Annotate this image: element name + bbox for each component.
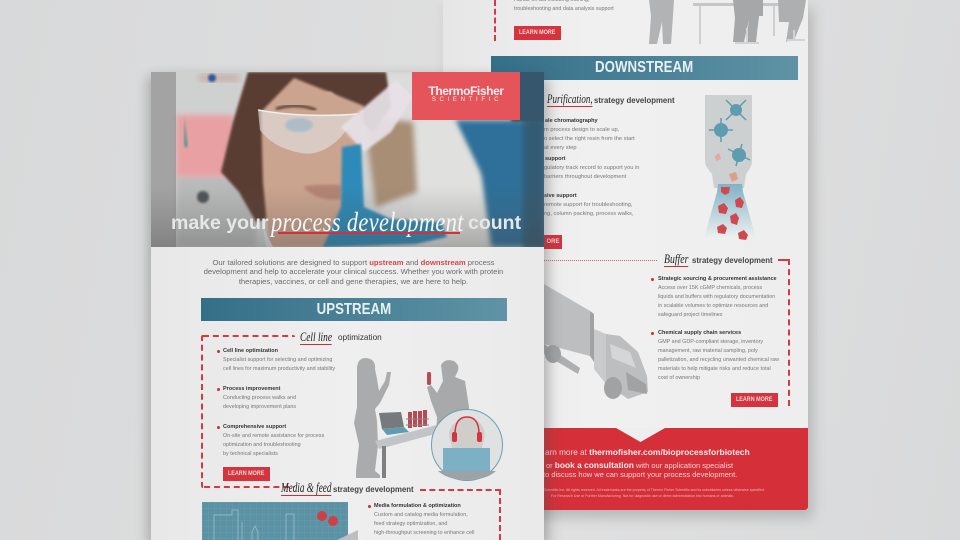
text block: chemical supply chain: GMP and GDP-compliant storage, inventory (658, 339, 763, 345)
heading: cell line optimization: optimization (338, 333, 382, 342)
text block: regulatory support: support (545, 156, 565, 162)
dashed border: media section (420, 489, 501, 540)
text block: strategic sourcing: in scalable volumes to optimize resources and (658, 303, 768, 309)
text block: chemical supply chain: palletization, and recycling unwanted chemical raw (658, 357, 779, 363)
heading: cell line optimization (300, 329, 382, 345)
heading: media and feed strategy (280, 480, 414, 496)
logo: Thermo Fisher Scientific: ThermoFisher (428, 84, 504, 98)
dashed border: cell line section (201, 335, 295, 488)
photo: scientist with goggles and test tube (151, 72, 544, 247)
button: learn more top: LEARN MORE (519, 29, 556, 36)
text block: book a consultation: to discuss how we can support your process development. (543, 470, 737, 479)
button: learn more buffer (731, 393, 778, 407)
text block: cell line optimization (217, 348, 335, 372)
heading band: upstream: UPSTREAM (317, 301, 391, 318)
logo: Thermo Fisher Scientific: SCIENTIFIC (432, 97, 502, 103)
text block: comprehensive support: remote support for troubleshooting, (544, 202, 633, 208)
illustration: lab staff at desk (649, 0, 806, 44)
text block: chromatography: ale chromatography (545, 118, 598, 124)
heading: purification strategy: strategy development (594, 96, 675, 105)
text block: regulatory support: barriers throughout development (544, 174, 626, 180)
text block: comprehensive support: sive support (544, 193, 577, 199)
heading band: downstream (491, 56, 798, 80)
text block: chromatography: m process design to scale up, (544, 127, 619, 133)
text block: legal (544, 488, 765, 498)
button: learn more buffer: LEARN MORE (736, 396, 773, 403)
text block: process improvement (217, 386, 296, 410)
title: process development (271, 207, 464, 237)
illustration: scientists at lab bench (354, 358, 469, 478)
heading: media and feed strategy: strategy development (333, 485, 414, 494)
dashed border: top section (494, 0, 496, 41)
heading: purification strategy: Purification, (547, 91, 593, 106)
panel: front page upstream (151, 72, 544, 540)
text block: comprehensive support (217, 424, 324, 457)
illustration: media lab blueprint (202, 502, 358, 540)
text block: media formulation: high-throughput screening to enhance cell (374, 530, 474, 536)
illustration: delivery truck (544, 284, 648, 399)
title: count (468, 212, 521, 234)
text block: chemical supply chain: management, raw material sampling, poly (658, 348, 758, 354)
text block: chromatography: at every step (544, 145, 577, 151)
text block: chemical supply chain (651, 330, 779, 381)
text block: book a consultation: or book a consultation with our application specialist (546, 460, 733, 470)
text block: media formulation: Custom and catalog media formulation, (374, 512, 468, 518)
text block: hands-on support (514, 0, 614, 12)
icon: circular inset technician with headphones (431, 409, 503, 481)
text block: hands-on support: troubleshooting and data analysis support (514, 6, 614, 12)
dashed border: buffer section (544, 260, 657, 261)
heading band: downstream: DOWNSTREAM (595, 59, 694, 76)
text block: legal: Scientific Inc. All rights reserved. All trademarks are the property of Thermo Fisher Scientific and its subsidiaries unless otherwise specified. (544, 488, 765, 492)
heading: purification strategy (547, 91, 675, 107)
button: learn more cell line: LEARN MORE (228, 470, 265, 477)
text block: strategic sourcing: liquids and buffers with regulatory documentation (658, 294, 775, 300)
arrow: notch pointer (616, 428, 665, 442)
text block: introduction (204, 258, 503, 286)
button: learn more purification: ORE (546, 239, 560, 245)
text block: learn more link: arn more at thermofisher.com/bioprocessforbiotech (545, 447, 750, 457)
text block: legal: For Research Use or Further Manufacturing. Not for diagnostic use or direct administration into humans or animals. (551, 494, 734, 498)
heading: buffer strategy: strategy development (692, 256, 773, 265)
text block: strategic sourcing (651, 276, 777, 318)
illustration: chromatography column (705, 95, 754, 240)
text block: cell line optimization: cell lines for maximum productivity and stability (223, 366, 335, 372)
dashed border: buffer right side (778, 259, 790, 406)
text block: book a consultation (543, 460, 737, 479)
text block: regulatory support: gulatory track record to support you in (544, 165, 639, 171)
text block: strategic sourcing: Access over 15K cGMP chemicals, process (658, 285, 762, 291)
logo: Thermo Fisher Scientific (412, 72, 520, 120)
text block: comprehensive support: Comprehensive support (223, 424, 286, 430)
title (171, 207, 521, 237)
text block: process improvement: Process improvement (223, 386, 280, 392)
heading: buffer strategy: Buffer (664, 252, 688, 266)
title: make your (171, 212, 269, 234)
panel: red call to action (443, 428, 808, 510)
text block: comprehensive support: by technical specialists (223, 451, 278, 457)
text block: introduction: therapies, vaccines, or cell and gene therapies, we are here to help. (239, 277, 468, 286)
text block: cell line optimization: Cell line optimization (223, 348, 278, 354)
heading: media and feed strategy: Media & feed (281, 480, 331, 495)
heading band: upstream (201, 298, 507, 321)
text block: media formulation: Media formulation & optimization (374, 503, 461, 509)
text block: strategic sourcing: Strategic sourcing & procurement assistance (658, 276, 777, 282)
text block: media formulation (368, 503, 474, 536)
text block: process improvement: Conducting process walks and (223, 395, 296, 401)
text block: chromatography (544, 118, 635, 151)
text block: chemical supply chain: cost of ownership (658, 375, 700, 381)
text block: introduction: development and help to accelerate your clinical success. Whether you work with protein (204, 267, 503, 276)
text block: chromatography: o select the right resin from the start (544, 136, 635, 142)
heading: buffer strategy (664, 252, 773, 267)
text block: comprehensive support: On-site and remote assistance for process (223, 433, 324, 439)
text block: comprehensive support: ng, column packing, process walks, (544, 211, 633, 217)
text block: introduction: Our tailored solutions are designed to support upstream and downstream process (212, 258, 495, 267)
button: learn more cell line (223, 467, 270, 481)
text block: comprehensive support: optimization and troubleshooting (223, 442, 301, 448)
panel: back page downstream (443, 0, 808, 510)
button: learn more purification (544, 235, 562, 249)
text block: cell line optimization: Specialist support for selecting and optimizing (223, 357, 332, 363)
text block: media formulation: feed strategy optimization, and (374, 521, 447, 527)
text block: strategic sourcing: safeguard project timelines (658, 312, 722, 318)
heading: cell line optimization: Cell line (300, 329, 332, 344)
text block: regulatory support (544, 156, 640, 180)
text block: chemical supply chain: Chemical supply chain services (658, 330, 741, 336)
text block: chemical supply chain: materials to help mitigate risks and reduce total (658, 366, 771, 372)
button: learn more top (514, 26, 561, 40)
text block: process improvement: developing improvement plans (223, 404, 296, 410)
text block: comprehensive support (544, 193, 633, 217)
